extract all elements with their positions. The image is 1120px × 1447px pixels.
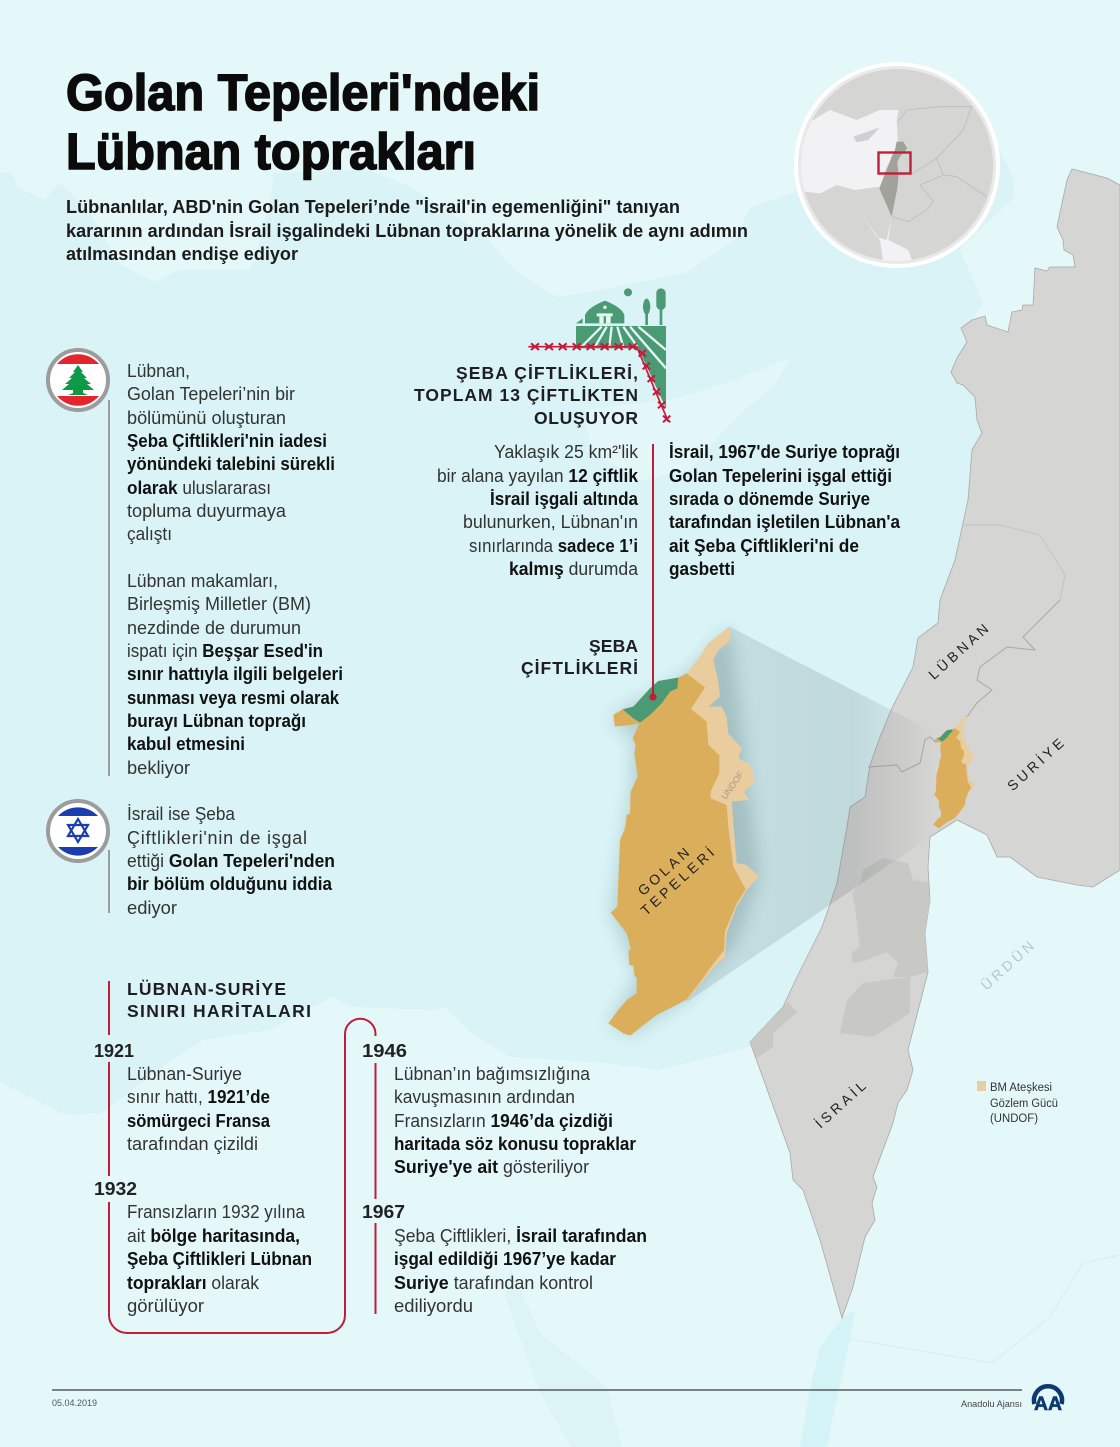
timeline: 1921: sınır hattı, 1921’de xyxy=(127,1087,270,1107)
text: 25 km2: bulunurken, Lübnan'ın xyxy=(463,512,638,532)
label: Şeba farms: ÇİFTLİKLERİ xyxy=(521,658,638,678)
text: Lebanon: Lübnan, xyxy=(127,361,190,381)
text: 1967 occupation: İsrail, 1967'de Suriye toprağı xyxy=(669,442,900,462)
line: Israel text rule xyxy=(108,850,110,913)
map labels: SURİYE xyxy=(1003,732,1069,794)
text: Lebanon: topluma duyurmaya xyxy=(127,501,287,521)
map labels xyxy=(634,617,1069,1131)
map labels: GOLAN xyxy=(634,842,695,899)
title xyxy=(66,64,540,180)
text: 25 km2: bir alana yayılan 12 çiftlik xyxy=(437,466,639,486)
text: Lebanon: yönündeki talebini sürekli xyxy=(127,454,335,474)
text: Lebanon: Birleşmiş Milletler (BM) xyxy=(127,594,311,614)
text: Lebanon: Şeba Çiftlikleri'nin iadesi xyxy=(127,431,327,451)
timeline: 1967: Suriye tarafından kontrol xyxy=(394,1273,593,1293)
text: Lebanon: burayı Lübnan toprağı xyxy=(127,711,306,731)
timeline: 1932 xyxy=(94,1178,312,1316)
timeline: 1967: Şeba Çiftlikleri, İsrail tarafından xyxy=(394,1226,647,1246)
red pointer line xyxy=(649,444,657,701)
small Golan on the main map xyxy=(933,715,975,828)
zoom cone linking small and large Golan xyxy=(660,627,950,1002)
icon: Israel flag xyxy=(48,801,108,861)
heading: Şeba farms: OLUŞUYOR xyxy=(534,408,638,428)
text: Israel: ediyor xyxy=(127,898,177,918)
icon: farm xyxy=(576,288,666,408)
text: Lebanon: nezdinde de durumun xyxy=(127,618,301,638)
text: 1967 occupation: gasbetti xyxy=(669,559,735,579)
timeline: 1921: 1921 xyxy=(94,1040,134,1061)
text: 25 km2: kalmış durumda xyxy=(509,559,639,579)
text: 25 km2: sınırlarında sadece 1’i xyxy=(469,536,638,556)
map: Syria, Lebanon and Israel xyxy=(750,169,1120,1318)
subtitle xyxy=(66,197,748,264)
text: 1967 occupation: tarafından işletilen Lübnan'a xyxy=(669,512,901,532)
text: Lebanon: ispatı için Beşşar Esed'in xyxy=(127,641,323,661)
legend: UNDOF: Gözlem Gücü xyxy=(990,1098,1058,1110)
timeline line xyxy=(109,981,376,1333)
timeline: 1946: haritada söz konusu topraklar xyxy=(394,1134,636,1154)
timeline: 1921: Lübnan-Suriye xyxy=(127,1064,242,1084)
heading: Şeba farms: ŞEBA ÇİFTLİKLERİ, xyxy=(456,363,638,383)
map labels: LÜBNAN xyxy=(924,617,994,682)
icon: Lebanon flag xyxy=(48,350,108,410)
timeline: 1967 xyxy=(362,1201,647,1316)
text: 25 km2: İsrail işgali altında xyxy=(490,489,639,509)
map labels: İSRAİL xyxy=(811,1075,872,1131)
footer rule xyxy=(52,1389,1022,1391)
map: country borders xyxy=(868,525,1065,772)
timeline: 1921: tarafından çizildi xyxy=(127,1134,258,1154)
line: Lebanon text rule xyxy=(108,400,110,776)
legend: UNDOF: (UNDOF) xyxy=(990,1113,1038,1125)
icon: Anadolu Agency logo: AA xyxy=(1034,1394,1062,1415)
text: Israel: bir bölüm olduğunu iddia xyxy=(127,874,333,894)
text: Lebanon: bekliyor xyxy=(127,758,190,778)
locator globe xyxy=(790,62,1000,268)
legend: UNDOF xyxy=(977,1081,1058,1125)
text: Lebanon: sunması veya resmi olarak xyxy=(127,688,340,708)
text: 25 km2: Yaklaşık 25 km²'lik xyxy=(494,442,639,462)
timeline: 1946: kavuşmasının ardından xyxy=(394,1087,575,1107)
text: 1967 occupation: sırada o dönemde Suriye xyxy=(669,489,870,509)
timeline: 1967: ediliyordu xyxy=(394,1296,473,1316)
icon: barbed wire xyxy=(528,343,670,422)
subtitle: Lübnanlılar, ABD'nin Golan Tepeleri’nde "İsrail'in egemenliğini" tanıyan xyxy=(66,197,680,217)
timeline: 1932: Fransızların 1932 yılına xyxy=(127,1202,306,1222)
heading: border maps: SINIRI HARİTALARI xyxy=(127,1001,311,1021)
text: Lebanon: Golan Tepeleri’nin bir xyxy=(127,384,295,404)
text: Israel: Çiftlikleri'nin de işgal xyxy=(127,828,307,848)
timeline: 1932: 1932 xyxy=(94,1178,137,1199)
locator red rectangle xyxy=(878,152,910,174)
text: Lebanon: bölümünü oluşturan xyxy=(127,408,286,428)
text: Lebanon: çalıştı xyxy=(127,524,172,544)
timeline: 1932: görülüyor xyxy=(127,1296,204,1316)
timeline: 1946: Suriye'ye ait gösteriliyor xyxy=(394,1157,589,1177)
large Golan map xyxy=(608,626,759,1036)
timeline: 1946: Fransızların 1946’da çizdiği xyxy=(394,1111,613,1131)
timeline: 1932: toprakları olarak xyxy=(127,1273,260,1293)
text: 1967 occupation: ait Şeba Çiftlikleri'ni de xyxy=(669,536,859,556)
label: Şeba farms: ŞEBA xyxy=(589,636,638,656)
text: 1967 occupation: Golan Tepelerini işgal ettiği xyxy=(669,466,892,486)
title: Lübnan toprakları xyxy=(66,123,476,180)
subtitle: kararının ardından İsrail işgalindeki Lübnan topraklarına yönelik de aynı adımın xyxy=(66,221,748,241)
text: Lebanon: kabul etmesini xyxy=(127,734,245,754)
legend: UNDOF: BM Ateşkesi xyxy=(990,1082,1052,1094)
timeline: 1921 xyxy=(94,1040,271,1154)
footer: date: 05.04.2019 xyxy=(52,1398,97,1408)
footer: agency name: Anadolu Ajansı xyxy=(961,1399,1022,1409)
timeline: 1967: 1967 xyxy=(362,1201,405,1222)
heading: border maps: LÜBNAN-SURİYE xyxy=(127,979,286,999)
text: Lebanon: olarak uluslararası xyxy=(127,478,271,498)
title: Golan Tepeleri'ndeki xyxy=(66,64,540,121)
timeline: 1921: sömürgeci Fransa xyxy=(127,1111,271,1131)
text: Lebanon: sınır hattıyla ilgili belgeleri xyxy=(127,664,343,684)
heading: border maps xyxy=(127,979,311,1021)
soft shadow of large Golan xyxy=(608,626,759,1036)
map labels: TEPELERİ xyxy=(637,841,720,919)
map labels: ÜRDÜN xyxy=(977,935,1039,993)
label: Şeba farms xyxy=(521,636,638,678)
timeline: 1932: ait bölge haritasında, xyxy=(127,1226,300,1246)
timeline: 1946: 1946 xyxy=(362,1040,407,1061)
text: 25 km2 xyxy=(437,442,639,579)
text: Israel: İsrail ise Şeba xyxy=(127,804,236,824)
text: Israel xyxy=(127,804,335,918)
text: Israel: ettiği Golan Tepeleri'nden xyxy=(127,851,335,871)
text: Lebanon xyxy=(127,361,343,778)
timeline: 1946: Lübnan’ın bağımsızlığına xyxy=(394,1064,591,1084)
timeline: 1946 xyxy=(362,1040,636,1177)
map labels: UNDOF xyxy=(719,769,746,801)
subtitle: atılmasından endişe ediyor xyxy=(66,244,298,264)
text: Lebanon: Lübnan makamları, xyxy=(127,571,278,591)
text: 1967 occupation xyxy=(669,442,901,579)
timeline: 1932: Şeba Çiftlikleri Lübnan xyxy=(127,1249,312,1269)
heading: Şeba farms xyxy=(414,363,638,428)
map: Israel darker patches xyxy=(750,858,930,1058)
heading: Şeba farms: TOPLAM 13 ÇİFTLİKTEN xyxy=(414,385,638,405)
timeline: 1967: işgal edildiği 1967’ye kadar xyxy=(394,1249,616,1269)
